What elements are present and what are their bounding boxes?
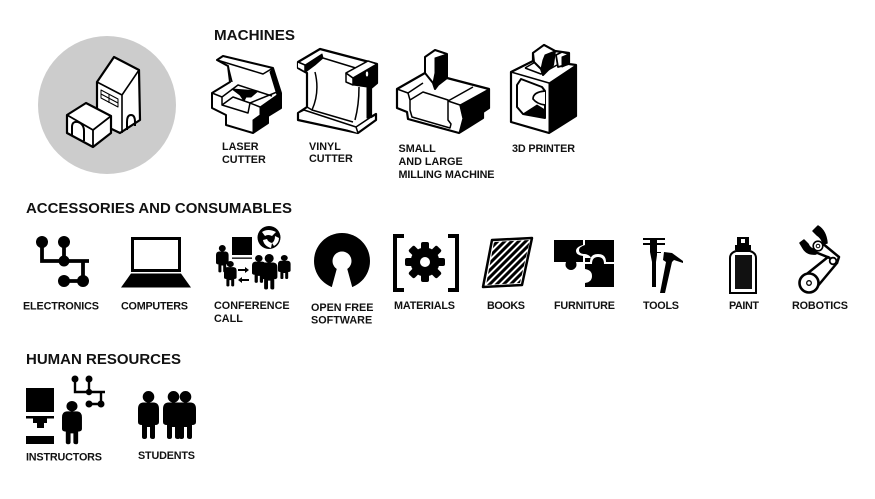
label: materials: MATERIALS: [394, 300, 455, 312]
label: milling machine: SMALL: [398, 143, 436, 155]
icon: milling machine: [397, 50, 489, 133]
icon: conference call: [216, 226, 291, 290]
icon: materials gear in brackets: [393, 234, 459, 292]
icon: 3D printer: [511, 45, 576, 133]
label: laser cutter: CUTTER: [222, 154, 266, 166]
icon: furniture puzzle: [554, 240, 614, 287]
label: books: BOOKS: [487, 300, 525, 312]
heading: human resources: HUMAN RESOURCES: [26, 352, 181, 368]
heading: machines: MACHINES: [214, 28, 295, 44]
icon: instructors: [26, 376, 105, 444]
label: laser cutter: LASER: [222, 141, 259, 153]
label: electronics: ELECTRONICS: [23, 300, 99, 312]
label: instructors: INSTRUCTORS: [26, 452, 102, 464]
label: furniture: FURNITURE: [554, 300, 615, 312]
label: open free software: OPEN FREE: [311, 302, 373, 314]
label: tools: TOOLS: [643, 300, 679, 312]
label: milling machine: AND LARGE: [398, 156, 463, 168]
icon: robotic arm: [800, 226, 839, 292]
icon: vinyl cutter: [298, 49, 377, 133]
icon: computer laptop: [121, 238, 191, 288]
icon: book: [482, 236, 534, 288]
label: 3D printer: 3D PRINTER: [512, 143, 575, 155]
icon: tools caliper and hammer: [643, 238, 683, 293]
label: conference call: CALL: [214, 313, 243, 325]
icon: laser cutter: [212, 56, 281, 133]
label: paint: PAINT: [729, 300, 759, 312]
label: vinyl cutter: CUTTER: [309, 153, 353, 165]
label: milling machine: MILLING MACHINE: [398, 169, 494, 181]
label: students: STUDENTS: [138, 450, 195, 462]
label: open free software: SOFTWARE: [311, 314, 372, 326]
icon: open source logo: [314, 233, 370, 290]
icon: fab lab building in grey circle: [38, 36, 176, 174]
icon: electronics: [36, 236, 89, 287]
heading: accessories and consumables: ACCESSORIES AND CONSUMABLES: [26, 201, 292, 217]
label: robotics: ROBOTICS: [792, 300, 848, 312]
label: vinyl cutter: VINYL: [309, 141, 341, 153]
icon: students: [138, 391, 196, 439]
label: conference call: CONFERENCE: [214, 300, 290, 312]
label: computers: COMPUTERS: [121, 300, 188, 312]
icon: paint spray can: [730, 237, 756, 293]
